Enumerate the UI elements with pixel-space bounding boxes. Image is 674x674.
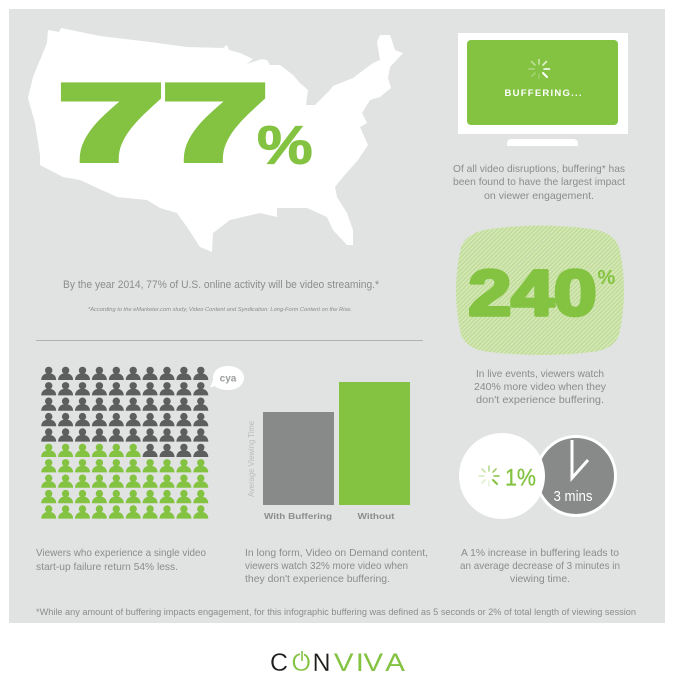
icon: spinner <box>479 466 499 486</box>
chart caption: In long form, Video on Demand content, <box>245 547 428 559</box>
panel: 240 percent <box>456 226 624 406</box>
bar: without buffering <box>339 382 410 505</box>
monitor stand <box>507 139 578 146</box>
chart caption: they don't experience buffering. <box>245 573 390 585</box>
clock caption: A 1% increase in buffering leads to <box>461 547 619 559</box>
clock caption: viewing time. <box>510 573 570 585</box>
panel: 77 percent map <box>28 28 403 313</box>
US map silhouette <box>28 28 403 252</box>
240 caption <box>474 368 607 406</box>
240 caption: In live events, viewers watch <box>476 368 604 380</box>
panel: people grid <box>36 366 244 573</box>
people caption <box>36 547 206 573</box>
bar label: with buffering: With Buffering <box>264 512 332 521</box>
panel: bar chart <box>245 382 428 585</box>
icon: spinner <box>529 60 550 78</box>
bar: with buffering <box>263 412 334 505</box>
monitor screen <box>467 40 618 125</box>
panel: monitor buffering <box>453 33 628 202</box>
monitor caption: been found to have the largest impact <box>453 176 625 188</box>
number 240: 240 <box>468 257 597 329</box>
people rows: returning and lost viewers <box>41 367 208 519</box>
clock caption: an average decrease of 3 minutes in <box>460 560 620 572</box>
y axis label: Average Viewing Time <box>247 421 256 497</box>
bottom footnote: *While any amount of buffering impacts engagement, for this infographic buffering was defined as 5 seconds or 2% of total length of viewing session <box>36 607 636 617</box>
clock hands <box>572 440 588 478</box>
monitor caption: Of all video disruptions, buffering* has <box>453 163 625 175</box>
people caption: start-up failure return 54% less. <box>36 561 178 573</box>
map caption: By the year 2014, 77% of U.S. online activity will be video streaming.* <box>63 279 380 291</box>
three minutes label: 3 mins <box>554 489 592 505</box>
white circle <box>459 433 545 519</box>
percent sign: % <box>257 115 313 176</box>
buffering label: BUFFERING... <box>504 88 582 99</box>
chart caption <box>245 547 428 585</box>
bubble text: cya <box>220 374 237 384</box>
clock caption <box>460 547 620 585</box>
panel: one percent and clock <box>459 433 620 585</box>
clock circle <box>536 436 616 516</box>
people caption: Viewers who experience a single video <box>36 547 206 559</box>
240 caption: don't experience buffering. <box>476 394 604 406</box>
power icon tick <box>300 650 304 661</box>
240 caption: 240% more video when they <box>474 381 607 393</box>
logo: Conviva <box>270 648 406 674</box>
monitor frame <box>458 33 628 134</box>
tv-shaped striped background <box>456 226 624 355</box>
bar label: without: Without <box>358 512 395 521</box>
monitor caption: on viewer engagement. <box>484 190 594 202</box>
speech bubble <box>210 366 244 390</box>
chart caption: viewers watch 32% more video when <box>245 560 408 572</box>
one percent label: 1% <box>505 464 536 492</box>
source footnote: *According to the eMarketer.com study, Video Content and Syndication: Long-Form Content on the Rise. <box>88 307 352 313</box>
monitor caption <box>453 163 625 202</box>
big number 77: 77 <box>59 63 267 183</box>
divider <box>36 340 423 341</box>
percent sign small: % <box>598 267 616 289</box>
